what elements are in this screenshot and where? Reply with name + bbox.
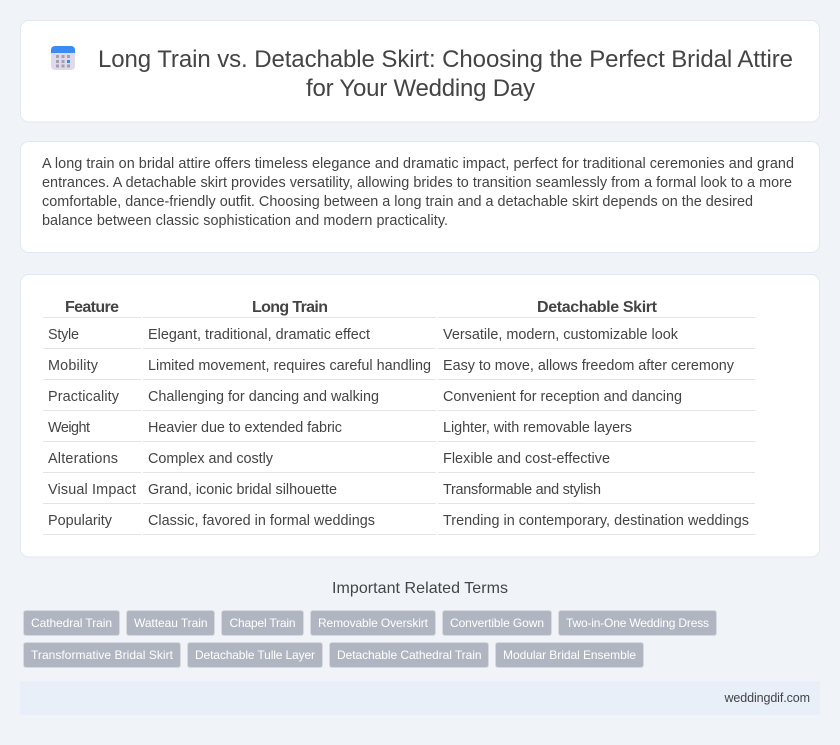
panel: introduction <box>20 142 820 252</box>
tag <box>442 610 552 636</box>
column: feature: Alterations <box>48 451 118 467</box>
tag <box>188 642 322 668</box>
column: detachable skirt: Lighter, with removable layers <box>443 420 632 436</box>
tag <box>496 642 644 668</box>
column: detachable skirt: Convenient for reception and dancing <box>443 389 682 405</box>
tag <box>310 610 436 636</box>
panel: title header <box>20 20 820 122</box>
column: long train: Elegant, traditional, dramatic effect <box>148 327 370 343</box>
column: feature: Popularity <box>48 513 113 529</box>
tag <box>222 610 304 636</box>
column: feature <box>48 327 136 529</box>
table header row: Long Train <box>252 299 328 316</box>
column: detachable skirt: Flexible and cost-effective <box>443 451 610 467</box>
column: feature: Practicality <box>48 389 120 405</box>
tag: Two-in-One Wedding Dress <box>566 616 709 630</box>
column: feature: Style <box>48 327 79 343</box>
table rules <box>43 317 755 535</box>
tag: Modular Bridal Ensemble <box>503 648 636 662</box>
intro text: entrances. A detachable skirt provides versatility, allowing brides to transition seamlessly from a formal look to a more <box>42 175 792 191</box>
tag <box>24 642 180 668</box>
column: detachable skirt: Versatile, modern, customizable look <box>443 327 679 343</box>
tag: Cathedral Train <box>31 616 112 630</box>
tag: Detachable Cathedral Train <box>337 648 482 662</box>
intro text: comfortable, dance-friendly outfit. Choosing between a long train and a detachable skirt depends on the desired <box>42 194 753 210</box>
panel: comparison table <box>20 274 820 557</box>
tag <box>330 642 488 668</box>
table header row: Detachable Skirt <box>537 299 658 316</box>
column: detachable skirt <box>443 327 749 529</box>
tag: Transformative Bridal Skirt <box>31 648 174 662</box>
intro text <box>42 156 794 229</box>
tag <box>558 610 716 636</box>
intro text: A long train on bridal attire offers timeless elegance and dramatic impact, perfect for traditional ceremonies and grand <box>42 156 794 172</box>
column: long train: Challenging for dancing and walking <box>148 389 379 405</box>
column: detachable skirt: Trending in contemporary, destination weddings <box>443 513 749 529</box>
title <box>98 46 793 102</box>
title: for Your Wedding Day <box>306 75 535 102</box>
tag <box>24 610 120 636</box>
column: feature: Visual Impact <box>48 482 136 498</box>
column: long train <box>148 327 431 529</box>
column: feature: Weight <box>48 420 90 436</box>
table header row: Feature <box>65 299 119 316</box>
title: Long Train vs. Detachable Skirt: Choosing the Perfect Bridal Attire <box>98 46 793 73</box>
tag: Detachable Tulle Layer <box>195 648 315 662</box>
tag: Watteau Train <box>134 616 208 630</box>
column: long train: Complex and costly <box>148 451 274 467</box>
column: long train: Classic, favored in formal weddings <box>148 513 375 529</box>
column: detachable skirt: Easy to move, allows freedom after ceremony <box>443 358 735 374</box>
tag <box>126 610 214 636</box>
column: long train: Limited movement, requires careful handling <box>148 358 431 374</box>
column: detachable skirt: Transformable and stylish <box>443 482 601 498</box>
icon: calendar <box>51 46 75 70</box>
footer site name: weddingdif.com <box>724 691 810 705</box>
intro text: balance between classic sophistication and modern practicality. <box>42 213 448 229</box>
column: long train: Heavier due to extended fabric <box>148 420 342 436</box>
tag: Convertible Gown <box>450 616 544 630</box>
footer bar <box>20 681 820 715</box>
column: feature: Mobility <box>48 358 99 374</box>
column: long train: Grand, iconic bridal silhouette <box>148 482 337 498</box>
table header row <box>65 299 658 316</box>
tag: Removable Overskirt <box>318 616 429 630</box>
tags: related terms <box>24 610 716 668</box>
heading: important related terms: Important Related Terms <box>332 580 508 597</box>
tag: Chapel Train <box>230 616 296 630</box>
